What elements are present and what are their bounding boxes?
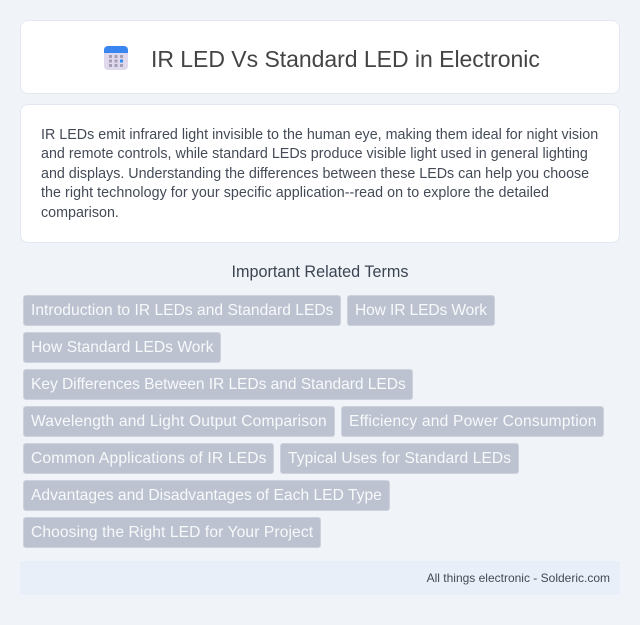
intro paragraph: the right technology for your specific application--read on to explore the detailed (41, 185, 549, 201)
intro paragraph: IR LEDs emit infrared light invisible to the human eye, making them ideal for night vision (41, 127, 598, 143)
tag list: Efficiency and Power Consumption (349, 413, 597, 430)
tag list: Wavelength and Light Output Comparison (31, 413, 327, 430)
icon: calendar (104, 46, 128, 70)
intro paragraph: and displays. Understanding the differences between these LEDs can help you choose (41, 166, 589, 182)
footer bar: All things electronic - Solderic.com (427, 571, 610, 585)
footer bar (20, 561, 620, 595)
intro paragraph: and remote controls, while standard LEDs produce visible light used in general lighting (41, 146, 588, 162)
section heading: Important Related Terms (232, 263, 408, 281)
intro text panel (20, 104, 620, 243)
tag list: Typical Uses for Standard LEDs (288, 450, 511, 467)
tag list: How IR LEDs Work (355, 302, 487, 319)
tag list: Common Applications of IR LEDs (31, 450, 267, 467)
tag list (23, 295, 604, 548)
tag list: Key Differences Between IR LEDs and Standard LEDs (31, 376, 406, 393)
tag list: How Standard LEDs Work (31, 339, 214, 356)
tag list: Advantages and Disadvantages of Each LED Type (31, 487, 382, 504)
intro paragraph: comparison. (41, 205, 119, 221)
title: IR LED Vs Standard LED in Electronic (151, 46, 540, 72)
header card (20, 20, 620, 94)
intro paragraph (41, 127, 598, 221)
tag list: Choosing the Right LED for Your Project (31, 524, 313, 541)
tag list: Introduction to IR LEDs and Standard LEDs (31, 302, 333, 319)
